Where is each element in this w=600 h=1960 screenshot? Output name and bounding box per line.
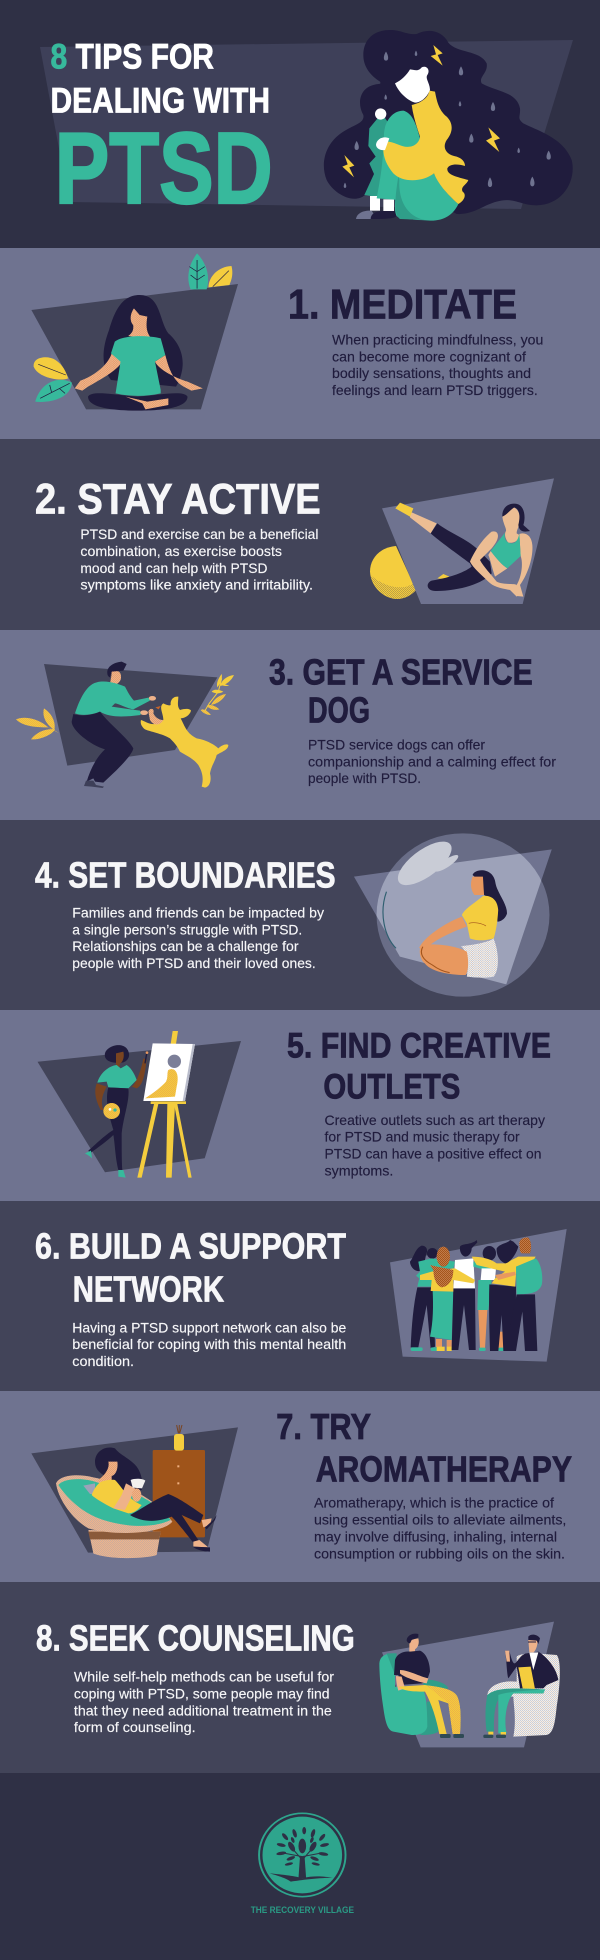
text block: support network description: condition.: [72, 1353, 134, 1369]
heading: 4. set boundaries: 4. SET BOUNDARIES: [35, 855, 336, 896]
icon: left leaves: [16, 708, 59, 739]
heading: 3. get a service dog: 3. GET A SERVICE: [269, 651, 533, 692]
panel: tip 3 service dog: [0, 630, 600, 820]
text block: boundaries description: people with PTSD and their loved ones.: [72, 955, 316, 971]
text block: stay active description: [80, 526, 318, 593]
text block: meditate description: bodily sensations, thoughts and: [332, 365, 531, 381]
text block: aromatherapy description: consumption or rubbing oils on the skin.: [314, 1545, 565, 1561]
panel: hero header: [0, 0, 600, 248]
text block: boundaries description: a single person’s struggle with PTSD.: [72, 921, 302, 937]
text block: counseling description: form of counseling.: [74, 1719, 196, 1735]
panel: tip 2 stay active: [0, 439, 600, 630]
illustration: woman relaxing in chair: [31, 1425, 238, 1558]
text block: aromatherapy description: using essential oils to alleviate ailments,: [314, 1512, 566, 1528]
text block: boundaries description: [72, 904, 324, 971]
heading: 7. try aromatherapy: [276, 1406, 572, 1490]
text block: creative outlets description: for PTSD and music therapy for: [324, 1129, 520, 1145]
text block: meditate description: [332, 331, 543, 398]
icon: right leaves: [201, 674, 234, 715]
text block: creative outlets description: [324, 1112, 545, 1179]
title: 8 tips for dealing with: [50, 36, 270, 121]
text block: aromatherapy description: may involve diffusing, inhaling, internal: [314, 1528, 557, 1544]
heading: 5. find creative outlets: OUTLETS: [323, 1066, 460, 1106]
text block: service dog description: PTSD service dogs can offer: [308, 736, 485, 752]
text block: boundaries description: Families and friends can be impacted by: [72, 904, 324, 920]
illustration: counseling session: [379, 1622, 560, 1747]
text block: meditate description: can become more cognizant of: [332, 348, 526, 364]
text block: aromatherapy description: Aromatherapy, which is the practice of: [314, 1495, 554, 1511]
text block: stay active description: mood and can help with PTSD: [80, 560, 268, 576]
text block: counseling description: coping with PTSD, some people may find: [74, 1686, 330, 1702]
text block: creative outlets description: PTSD can have a positive effect on: [324, 1146, 542, 1162]
heading: 5. find creative outlets: 5. FIND CREATIVE: [287, 1025, 551, 1065]
logo: the recovery village tree: [259, 1813, 346, 1897]
icon: lightning bolts: [342, 45, 500, 177]
logo text: THE RECOVERY VILLAGE: [251, 1905, 354, 1916]
heading: 6. build a support network: [35, 1226, 346, 1310]
text block: service dog description: companionship and a calming effect for: [308, 753, 556, 769]
heading: 6. build a support network: NETWORK: [73, 1269, 225, 1310]
panel: tip 8 seek counseling: [0, 1582, 600, 1773]
text block: creative outlets description: symptoms.: [324, 1163, 393, 1179]
heading: 3. get a service dog: DOG: [308, 690, 370, 731]
title: 8 tips for dealing with: DEALING WITH: [50, 81, 270, 121]
heading: 3. get a service dog: [269, 651, 533, 731]
text block: meditate description: feelings and learn PTSD triggers.: [332, 382, 538, 398]
illustration: woman inside bubble: [354, 833, 552, 997]
text block: aromatherapy description: [314, 1495, 566, 1561]
illustration: woman painting at easel: [85, 1031, 195, 1178]
heading: 6. build a support network: 6. BUILD A SUPPORT: [35, 1226, 346, 1267]
text block: stay active description: PTSD and exercise can be a beneficial: [80, 526, 318, 542]
panel: footer: [0, 1773, 600, 1960]
heading: 1. meditate: 1. MEDITATE: [288, 280, 517, 327]
text block: boundaries description: Relationships can be a challenge for: [72, 938, 299, 954]
panel: tip 4 set boundaries: [0, 820, 600, 1010]
illustration: group hugging: [390, 1229, 567, 1362]
text block: service dog description: [308, 736, 556, 786]
illustration: woman meditating: [31, 253, 238, 411]
illustration: woman exercising: [370, 478, 554, 604]
title: PTSD: PTSD: [55, 113, 273, 225]
text block: meditate description: When practicing mindfulness, you: [332, 331, 543, 347]
panel: tip 1 meditate: [0, 248, 600, 439]
text block: stay active description: combination, as exercise boosts: [80, 543, 282, 559]
title: 8 tips for dealing with: 8 TIPS FOR: [50, 36, 214, 76]
text block: stay active description: symptoms like anxiety and irritability.: [80, 577, 313, 593]
text block: support network description: [72, 1319, 347, 1369]
panel: tip 6 support network: [0, 1201, 600, 1391]
text block: creative outlets description: Creative outlets such as art therapy: [324, 1112, 545, 1128]
heading: 2. stay active: 2. STAY ACTIVE: [35, 476, 321, 523]
illustration: woman with long dark hair: [324, 30, 573, 221]
text block: support network description: Having a PTSD support network can also be: [72, 1319, 347, 1335]
text block: support network description: beneficial for coping with this mental health: [72, 1336, 346, 1352]
text block: counseling description: While self-help methods can be useful for: [74, 1669, 334, 1685]
panel: tip 7 aromatherapy: [0, 1391, 600, 1582]
panel: tip 5 creative outlets: [0, 1010, 600, 1201]
heading: 5. find creative outlets: [287, 1025, 551, 1106]
illustration: man playing with dog: [16, 662, 234, 788]
text block: counseling description: that they need additional treatment in the: [74, 1702, 332, 1718]
heading: 8. seek counseling: 8. SEEK COUNSELING: [36, 1618, 355, 1659]
text block: counseling description: [74, 1669, 334, 1735]
icon: rain drops: [344, 51, 551, 188]
text block: service dog description: people with PTSD.: [308, 770, 421, 786]
heading: 7. try aromatherapy: 7. TRY: [276, 1406, 371, 1447]
